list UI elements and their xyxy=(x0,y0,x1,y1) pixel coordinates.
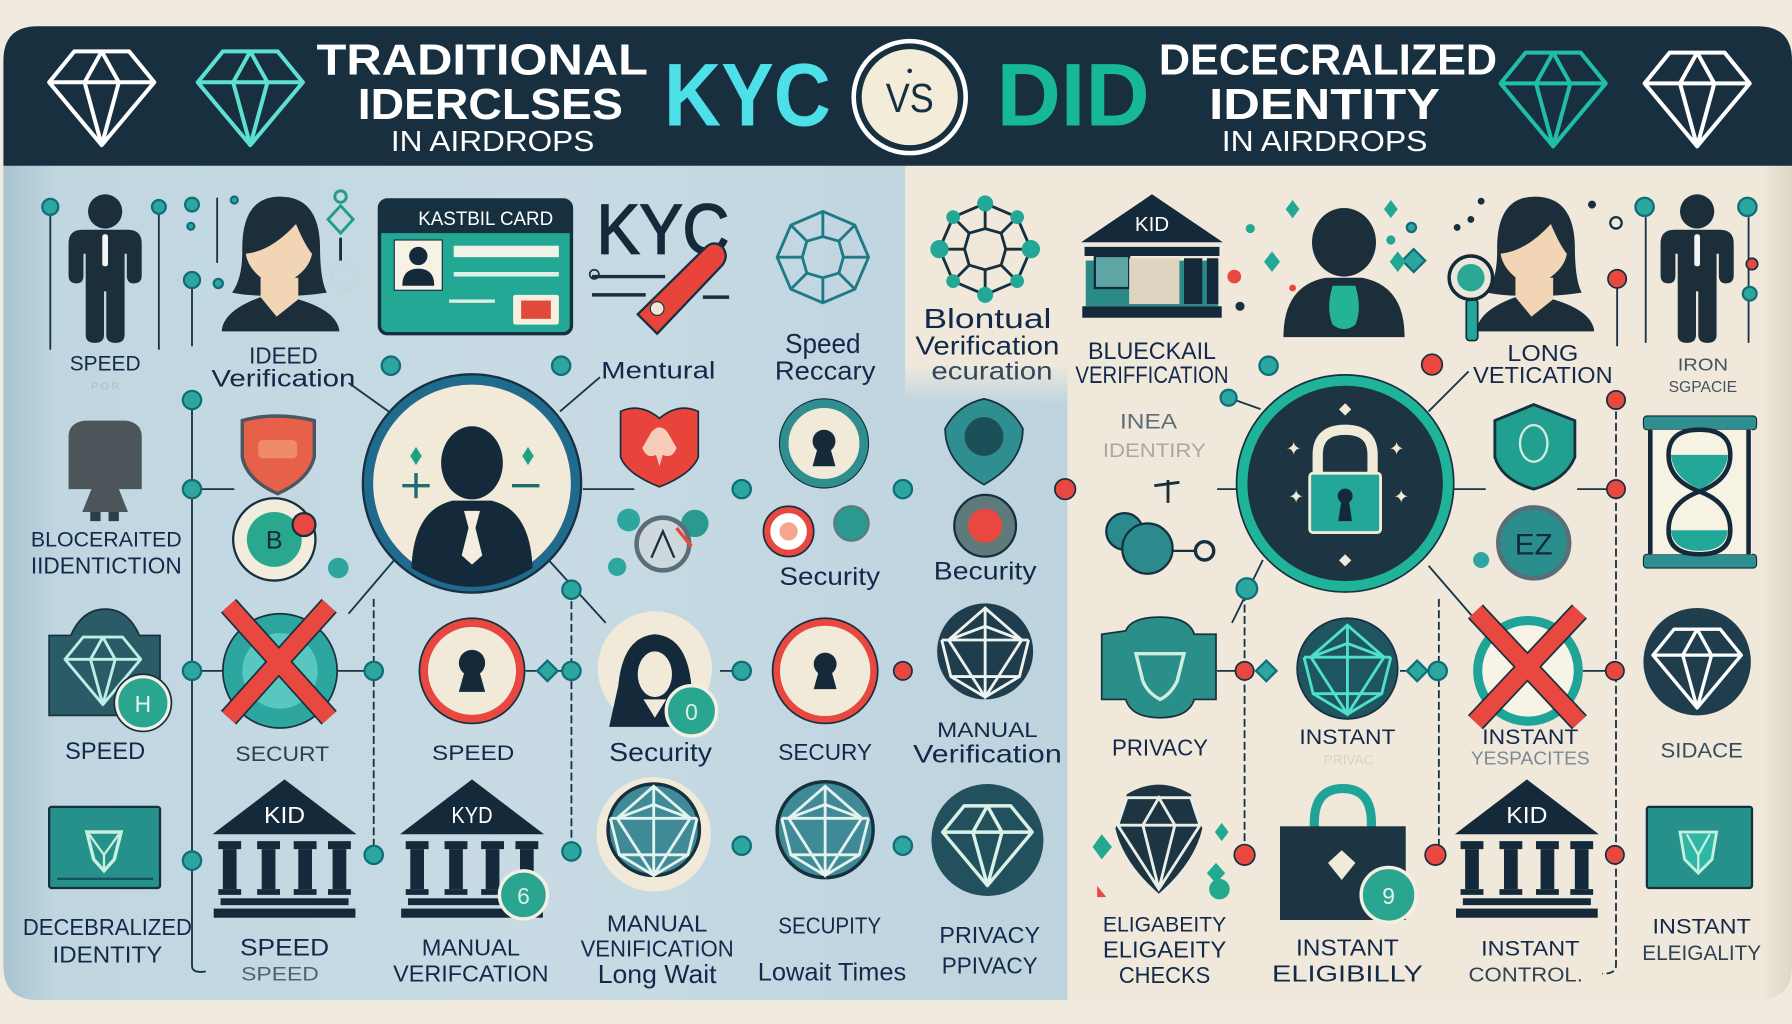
label: long verification xyxy=(1473,340,1613,388)
icon: ID card xyxy=(379,200,571,334)
icon: diamond medallion two xyxy=(777,782,873,878)
label: ideed verification xyxy=(211,342,355,392)
label: privacy xyxy=(939,922,1040,979)
icon: green token ring xyxy=(233,498,349,581)
red connector nodes xyxy=(894,258,1758,865)
label: speed recary: Reccary xyxy=(775,355,876,385)
icon: standing man left xyxy=(69,194,142,343)
label: manual verification long wait: MANUAL xyxy=(607,910,707,936)
icon: central DID padlock circle xyxy=(1237,375,1454,592)
icon: globe diamond xyxy=(937,603,1033,699)
label: blontual verification xyxy=(915,303,1059,385)
label: security: Security xyxy=(609,737,713,767)
label: instant control xyxy=(1469,935,1583,987)
connector nodes xyxy=(42,197,1757,870)
label: manual verification: Verification xyxy=(913,740,1062,768)
label: decentralized identity: DECEBRALIZED xyxy=(23,914,192,940)
label: bluekail verification xyxy=(1075,338,1229,389)
label: iron space: IRON xyxy=(1678,354,1728,374)
heading: traditional identity: TRADITIONAL xyxy=(317,36,648,84)
icon: KID bank left: KID xyxy=(264,802,305,828)
label: instant xyxy=(1299,724,1395,768)
heading: KYC mark with pencil xyxy=(590,191,729,334)
heading: traditional identity xyxy=(317,36,648,158)
label: manual verification long wait: Long Wait xyxy=(598,959,717,989)
heading: decentralized identity: DECECRALIZED xyxy=(1159,36,1497,84)
icon: network sphere left xyxy=(777,211,869,303)
label: instant yespacites: YESPACITES xyxy=(1471,748,1590,769)
connector lines xyxy=(50,198,1749,974)
icon: EZ token: EZ xyxy=(1515,528,1553,561)
label: inea identity xyxy=(1103,409,1206,462)
label: eligibility checks xyxy=(1103,911,1226,988)
icon: overlapped tokens cluster xyxy=(1106,480,1214,574)
icon: central DID padlock circle: ◆ xyxy=(1339,401,1352,418)
icon: central KYC person circle xyxy=(363,374,581,593)
label: instant yespacites xyxy=(1471,724,1590,769)
label: iron space: SGPACIE xyxy=(1669,379,1737,396)
icon: EZ token xyxy=(1473,507,1569,578)
icon: central DID padlock circle: ✦ xyxy=(1286,438,1301,459)
panel: right decentralized side xyxy=(905,160,1792,1000)
label: mentural: Mentural xyxy=(601,357,715,384)
heading: KYC mark with pencil: KYC xyxy=(597,191,729,270)
icon: KID bank right xyxy=(1455,779,1599,918)
heading: decentralized identity: IDENTITY xyxy=(1209,81,1440,129)
label: security: Security xyxy=(779,563,880,591)
decorative icon: small green tag xyxy=(328,191,358,289)
label: blockraited identiction: BLOCERAITED xyxy=(31,526,182,551)
icon: dark diamond circle xyxy=(1643,608,1751,715)
heading: DID: DID xyxy=(997,45,1150,145)
label: speed recary: Speed xyxy=(785,328,861,359)
heading: traditional identity: IDERCLSES xyxy=(358,81,623,129)
label: blockraited identiction xyxy=(31,526,182,579)
icon: KID bank right: KID xyxy=(1506,802,1547,828)
icon: dark jacket xyxy=(69,421,142,521)
label: speed: SPEED xyxy=(432,740,514,765)
icon: security cluster xyxy=(608,509,709,576)
heading: traditional identity: IN AIRDROPS xyxy=(391,126,594,158)
icon: KYD bank: KYD xyxy=(451,802,493,828)
label: blockraited identiction: IIDENTICTION xyxy=(31,553,182,579)
icon: white diamond right xyxy=(1645,53,1750,146)
label: manual verification long wait: VENIFICATION xyxy=(581,936,734,962)
icon: crossed teal ring xyxy=(1475,611,1579,722)
label: security lowait times: SECUPITY xyxy=(778,913,881,939)
icon: red keyhole circle two xyxy=(773,618,878,723)
label: bluekail verification: VERIFFICATION xyxy=(1075,362,1229,389)
label: speed: P O R xyxy=(91,382,119,393)
heading: decentralized identity xyxy=(1159,36,1497,158)
icon: central DID padlock circle: ✦ xyxy=(1288,486,1304,507)
icon: padlock bag xyxy=(1280,789,1416,922)
label: securt: SECURT xyxy=(235,741,329,766)
icon: teal globe diamond xyxy=(1297,618,1398,719)
icon: device with diamond: H xyxy=(135,691,151,717)
label: speed: SPEED xyxy=(70,350,141,375)
label: sidace: SIDACE xyxy=(1661,738,1743,763)
icon: teal keyhole circle xyxy=(779,399,869,488)
label: security lowait times xyxy=(758,913,906,987)
label: instant: INSTANT xyxy=(1299,724,1395,749)
label: instant eligibility xyxy=(1642,914,1761,965)
icon: dark gem shield xyxy=(1115,785,1202,894)
icon: green token ring: B xyxy=(266,527,283,555)
icon: teal diamond left xyxy=(198,51,303,145)
label: manual verification: MANUAL xyxy=(422,934,520,960)
icon: teal diamond right xyxy=(1501,53,1606,146)
label: instant control: INSTANT xyxy=(1481,935,1579,960)
label: blontual verification: Blontual xyxy=(923,303,1051,334)
label: eligibility checks: ELIGAEITY xyxy=(1103,937,1226,963)
icon: red ring and teal token xyxy=(763,506,869,557)
label: eligibility checks: CHECKS xyxy=(1119,962,1210,988)
label: long verification: VETICATION xyxy=(1473,362,1613,388)
label: instant control: CONTROL. xyxy=(1469,964,1583,987)
icon: red security circle xyxy=(954,495,1016,557)
icon: hourglass xyxy=(1643,416,1757,568)
label: decentralized identity: IDENTITY xyxy=(53,941,162,967)
heading: decentralized identity: IN AIRDROPS xyxy=(1222,126,1427,158)
icon: ID card: KASTBIL CARD xyxy=(418,208,553,230)
icon: red keyhole circle xyxy=(419,618,525,723)
label: long verification: LONG xyxy=(1507,340,1578,366)
icon: KYD bank xyxy=(400,779,547,919)
icon: teal device xyxy=(1102,617,1216,718)
icon: central DID padlock circle: ◆ xyxy=(1339,552,1352,569)
label: privacy: PRIVACY xyxy=(1112,734,1208,760)
label: ideed verification: Verification xyxy=(211,365,355,392)
label: speed xyxy=(70,350,141,393)
heading: KYC: KYC xyxy=(664,45,831,145)
label: bluekail verification: BLUECKAIL xyxy=(1088,338,1216,365)
icon: woman left xyxy=(222,197,339,331)
header band xyxy=(3,26,1792,166)
icon: teal screen left xyxy=(49,807,160,888)
label: secury: SECURY xyxy=(778,739,872,765)
label: ideed verification: IDEED xyxy=(249,342,318,368)
label: speed: SPEED xyxy=(240,934,329,961)
icon: teal shield badge xyxy=(945,399,1023,485)
icon: device with diamond xyxy=(49,609,171,731)
label: blontual verification: ecuration xyxy=(931,357,1053,385)
label: becurity: Becurity xyxy=(934,557,1037,585)
icon: teal shield right xyxy=(1495,405,1575,489)
label: manual verification xyxy=(393,934,549,987)
label: eligibility checks: ELIGABEITY xyxy=(1103,911,1226,936)
label: instant eligibility xyxy=(1272,934,1423,987)
icon: teal screen right xyxy=(1647,807,1752,888)
icon: dark diamond circle privacy xyxy=(931,784,1043,896)
label: instant eligibility: ELIGIBILLY xyxy=(1272,961,1423,987)
decorative gem dots xyxy=(1093,823,1230,899)
label: instant yespacites: INSTANT xyxy=(1482,724,1578,749)
label: instant eligibility: ELEIGALITY xyxy=(1642,940,1761,965)
panel transition xyxy=(905,363,1067,405)
icon: crossed teal circle xyxy=(223,606,337,728)
icon: woman portrait circle xyxy=(598,611,717,736)
label: privacy: PRIVACY xyxy=(939,922,1040,948)
label: manual verification long wait xyxy=(581,910,734,989)
label: manual verification xyxy=(913,717,1062,768)
label: speed: SPEED xyxy=(241,964,319,986)
icon: VS badge xyxy=(854,41,966,153)
icon: red heart shield xyxy=(621,408,698,487)
decorative dots around person xyxy=(1227,198,1622,311)
icon: woman portrait circle: 0 xyxy=(685,699,698,725)
icon: central DID padlock circle: ✦ xyxy=(1389,438,1404,459)
icon: node network right of divider xyxy=(930,195,1040,303)
label: iron space xyxy=(1669,354,1737,396)
label: speed recary xyxy=(775,328,876,385)
icon: standing man right xyxy=(1661,194,1734,343)
icon: padlock bag: 9 xyxy=(1382,883,1395,909)
icon: central DID padlock circle: ✦ xyxy=(1393,486,1409,507)
label: instant eligibility: INSTANT xyxy=(1653,914,1751,939)
label: privacy: PPIVACY xyxy=(942,953,1038,979)
icon: woman with magnifier xyxy=(1449,197,1594,341)
icon: diamond medallion xyxy=(597,777,711,891)
label: speed: SPEED xyxy=(65,738,145,765)
label: manual verification: VERIFCATION xyxy=(393,961,549,987)
icon: VS badge: VS xyxy=(886,75,934,121)
icon: white diamond left xyxy=(49,51,154,145)
label: inea identity: IDENTIRY xyxy=(1103,440,1206,462)
icon: user person xyxy=(1283,208,1405,337)
panel: left traditional side xyxy=(3,160,1067,1000)
label: decentralized identity xyxy=(23,914,192,967)
label: instant: PRIVAC xyxy=(1324,753,1374,768)
icon: red shield xyxy=(242,416,314,494)
label: manual verification: MANUAL xyxy=(937,717,1038,742)
icon: KID building xyxy=(1081,194,1223,318)
label: instant eligibility: INSTANT xyxy=(1296,934,1399,960)
label: blontual verification: Verification xyxy=(915,330,1059,360)
label: speed xyxy=(240,934,329,986)
label: inea identity: INEA xyxy=(1120,409,1178,434)
icon: KID building: KID xyxy=(1135,213,1169,236)
icon: KID bank left xyxy=(213,779,357,918)
icon: KYD bank: 6 xyxy=(517,883,530,909)
label: security lowait times: Lowait Times xyxy=(758,959,906,987)
